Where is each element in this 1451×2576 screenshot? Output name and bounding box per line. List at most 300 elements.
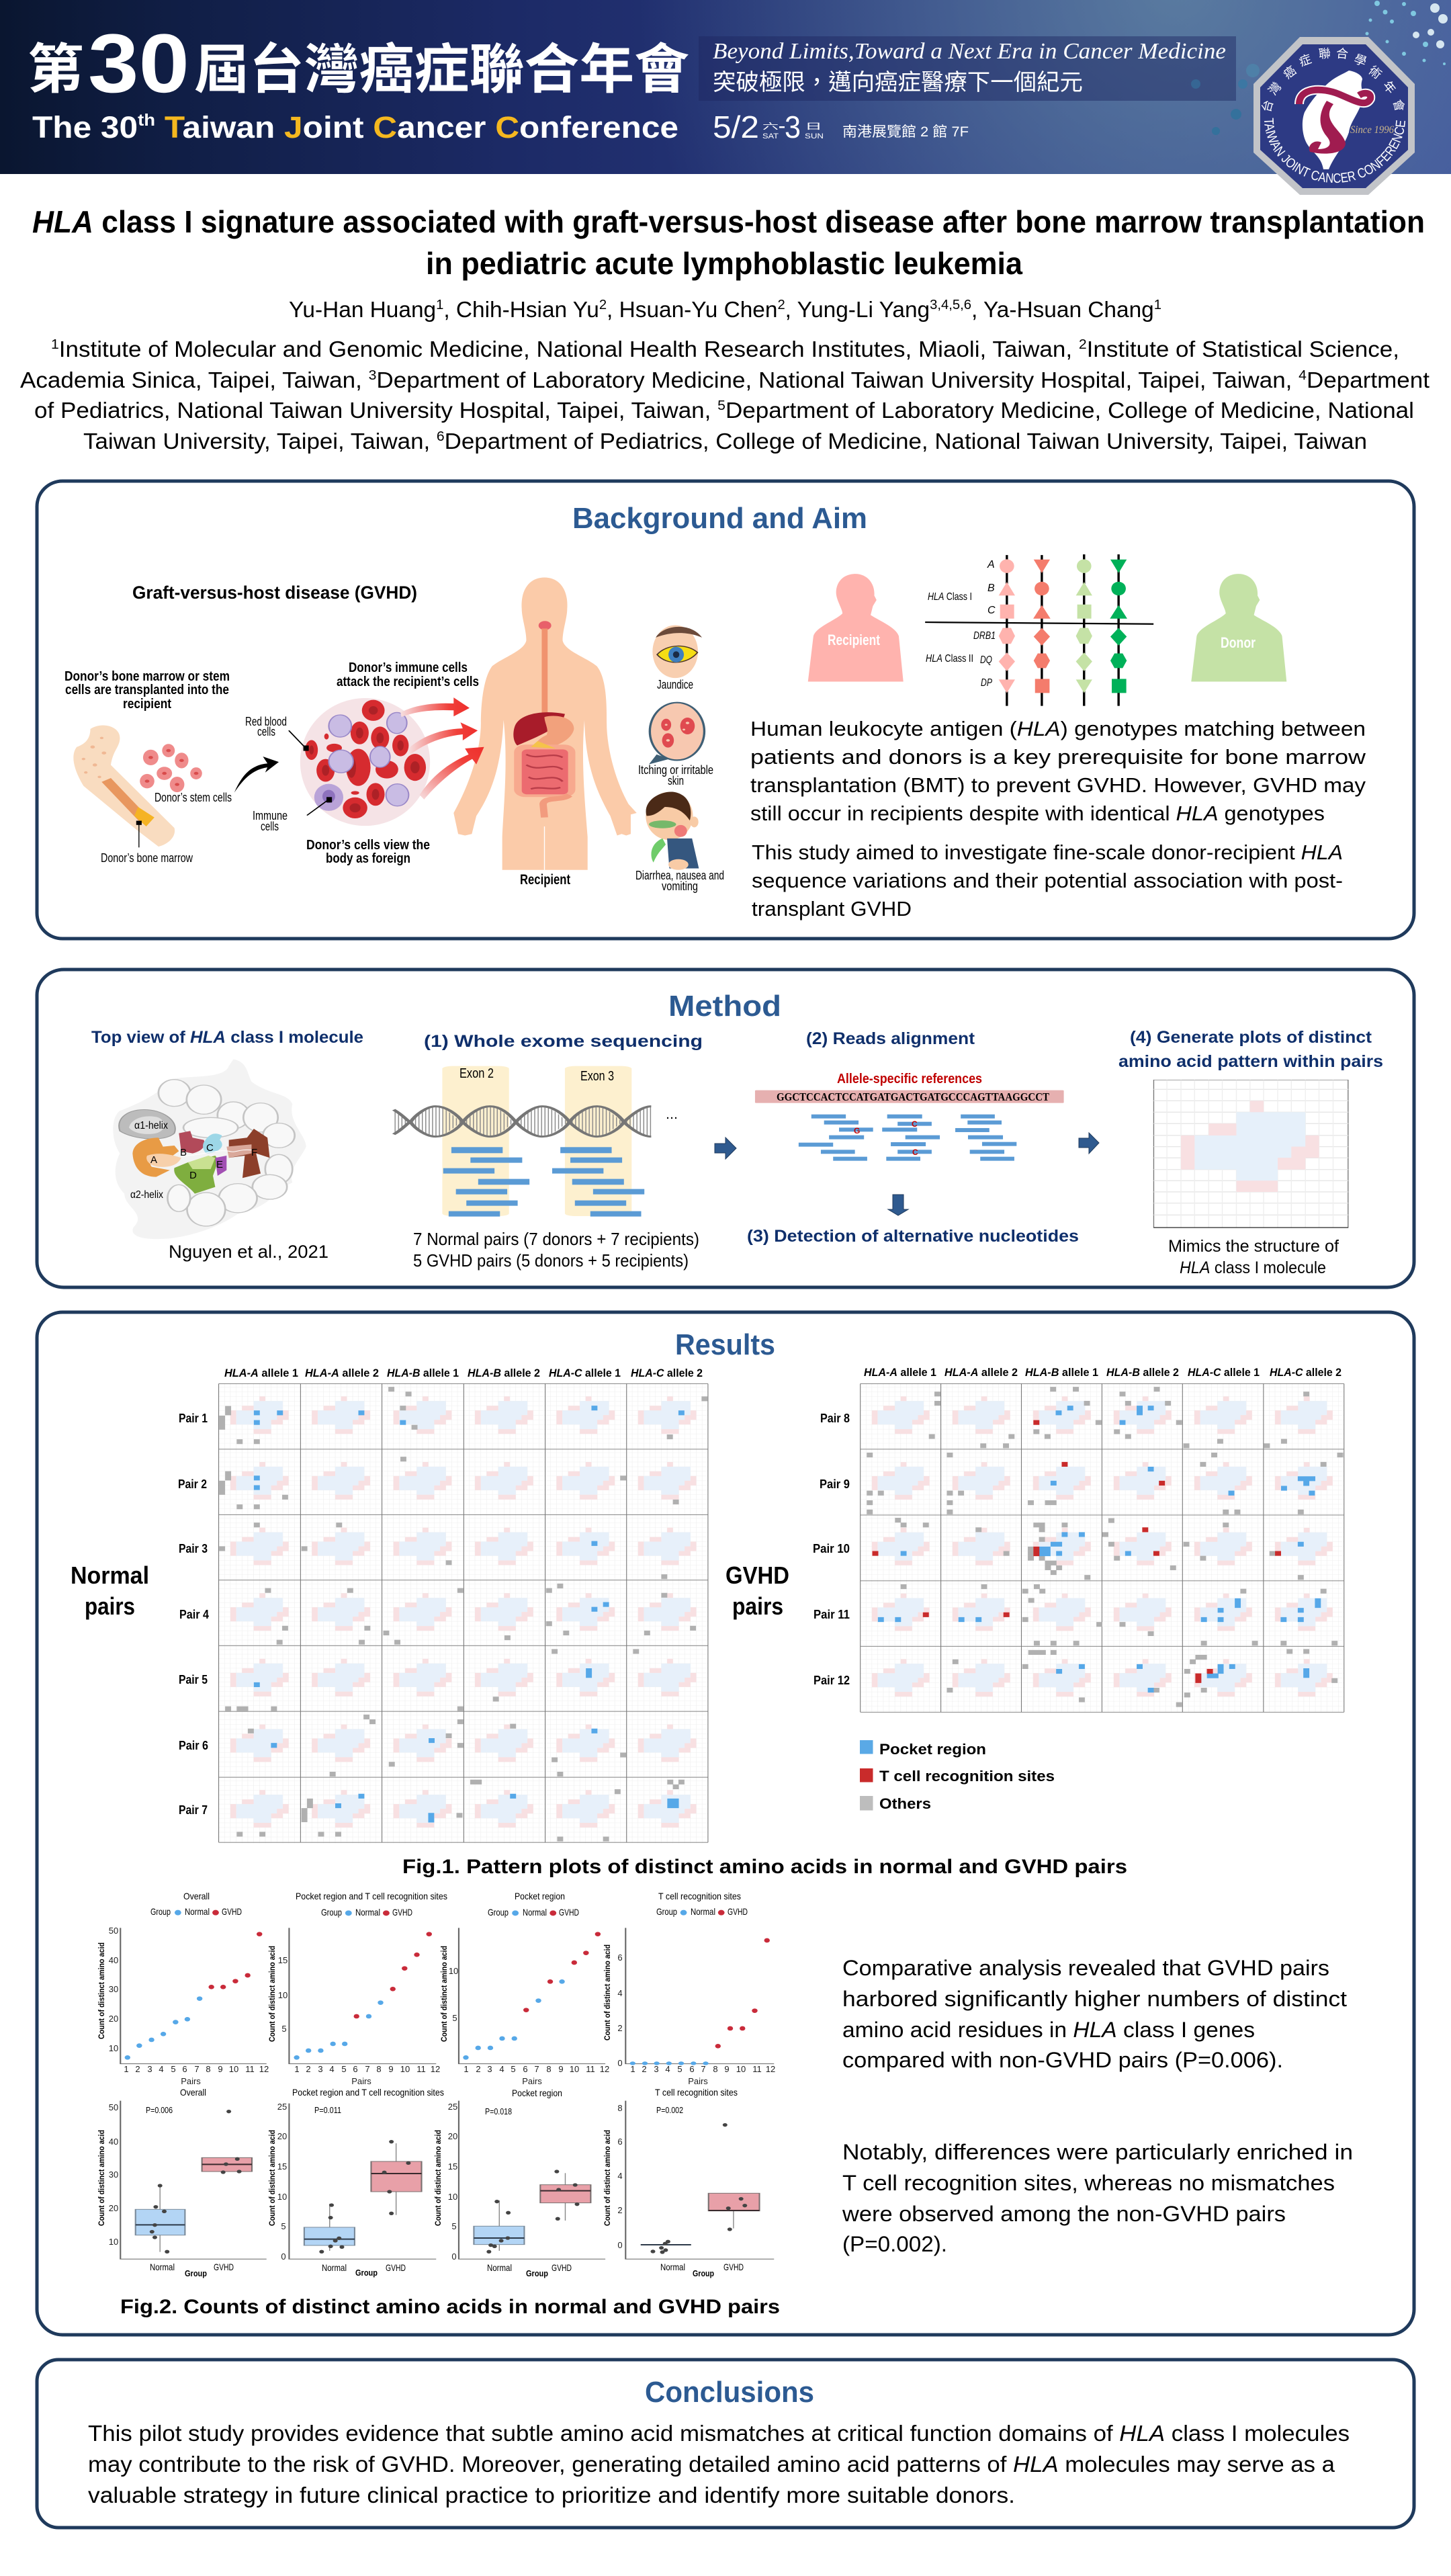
hla matching diagram: HLA Class II — [926, 653, 973, 664]
exome sequencing diagram: Exon 2 — [459, 1066, 494, 1081]
chart: boxplot t cell recognition: 8 — [617, 2103, 623, 2113]
chart: scatter t cell recognition: Normal — [691, 1906, 715, 1917]
chart: scatter pocket and t cell: 3 — [318, 2064, 323, 2074]
chart: scatter t cell recognition: 2 — [617, 2023, 623, 2033]
label: gvhd pairs: GVHD — [726, 1561, 789, 1589]
row labels: gvhd pairs: Pair 9 — [820, 1477, 850, 1491]
chart: scatter overall: 9 — [218, 2064, 223, 2074]
english conference title: th — [138, 111, 155, 130]
hla matching diagram: DQ — [980, 654, 992, 666]
citation: Nguyen et al., 2021 — [169, 1242, 328, 1262]
label: jaundice: Jaundice — [657, 678, 693, 691]
chart: boxplot overall: P=0.006 — [146, 2105, 173, 2115]
chart: scatter pocket region — [439, 1891, 609, 2086]
chart: boxplot pocket region: 20 — [448, 2131, 457, 2141]
text: t cell enrichment — [842, 2140, 1353, 2256]
chart: scatter overall: 10 — [229, 2064, 238, 2074]
chart: scatter t cell recognition — [603, 1891, 775, 2086]
chart: scatter pocket and t cell — [267, 1891, 447, 2086]
text: conclusions: This pilot study provides evidence that subtle amino acid mismatches at critical function domains of HLA class I molecules — [88, 2421, 1350, 2446]
heading: generate plots: amino acid pattern within pairs — [1118, 1052, 1383, 1071]
chart: scatter pocket and t cell: 8 — [376, 2064, 382, 2074]
column headers: normal grid: HLA-C allele 1 — [549, 1367, 621, 1379]
chart: scatter overall: 50 — [109, 1926, 118, 1936]
label: diarrhea: Diarrhea, nausea and — [635, 869, 724, 882]
conference header banner — [0, 0, 1451, 174]
label: immune cells: cells — [261, 820, 279, 833]
chart: boxplot t cell recognition: 6 — [617, 2137, 623, 2147]
column headers: gvhd grid: HLA-B allele 1 — [1025, 1366, 1098, 1379]
legend: pattern plot categories: Others — [879, 1795, 931, 1812]
text: t cell enrichment: Notably, differences were particularly enriched in — [842, 2140, 1353, 2164]
chart: boxplot overall: GVHD — [214, 2262, 234, 2272]
affiliations: 1 — [51, 337, 59, 352]
date and venue: 六 — [762, 122, 779, 131]
chart: boxplot t cell recognition: GVHD — [723, 2262, 744, 2272]
date and venue: SUN — [805, 132, 824, 140]
panel: conclusions — [37, 2360, 1414, 2528]
hla matching diagram: C — [987, 605, 996, 616]
icon: itchy skin bubble — [649, 703, 704, 765]
authors: , Yung-Li Yang — [785, 297, 930, 322]
chart: boxplot pocket and t cell: Normal — [322, 2262, 347, 2273]
authors: 1 — [436, 298, 443, 312]
chart: boxplot pocket and t cell: 20 — [277, 2131, 287, 2141]
label: transplant step: Donor’s bone marrow or stem — [64, 669, 230, 684]
text: background paragraph: transplantation (BMT) to prevent GVHD. However, GVHD may — [750, 773, 1366, 797]
chart: scatter t cell recognition: 6 — [617, 1952, 623, 1963]
hla molecule illustration: C — [206, 1142, 214, 1154]
label: immune cells — [253, 809, 288, 833]
english conference title: The 30 — [32, 110, 128, 144]
conference logo: 台 — [1260, 99, 1276, 114]
date and venue: SAT — [762, 132, 779, 140]
legend: pattern plot categories: Pocket region — [879, 1741, 986, 1758]
affiliations: Department of Pediatrics, College of Medicine, National Taiwan University, Taipei, Taiwan — [445, 429, 1367, 454]
hla matching diagram — [808, 554, 1286, 706]
affiliations: Taiwan University, Taipei, Taiwan, — [83, 429, 411, 454]
column headers: gvhd grid: HLA-B allele 2 — [1106, 1366, 1179, 1379]
chart: scatter t cell recognition: 10 — [736, 2064, 746, 2074]
row labels: gvhd pairs — [813, 1412, 850, 1687]
reads alignment diagram — [755, 1072, 1064, 1161]
chart: boxplot pocket region: 0 — [451, 2251, 457, 2262]
hla matching diagram: Donor — [1221, 634, 1256, 651]
panel: method — [37, 970, 1414, 1287]
chart: scatter pocket region: 5 — [452, 2013, 457, 2023]
date and venue: 3 — [785, 110, 801, 144]
caption: figure 2: Fig.2. Counts of distinct amino acids in normal and GVHD pairs — [120, 2296, 780, 2318]
chart: boxplot pocket region: P=0.018 — [485, 2106, 512, 2116]
conference logo: 會 — [1391, 98, 1407, 113]
conference logo: 灣 — [1266, 80, 1284, 97]
row labels: gvhd pairs: Pair 8 — [820, 1412, 850, 1425]
chart: boxplot pocket and t cell: Group — [355, 2268, 378, 2278]
chart: scatter t cell recognition: 12 — [766, 2064, 775, 2074]
chart: scatter overall: 5 — [171, 2064, 176, 2074]
label: itching — [638, 763, 713, 787]
panel: results — [37, 1312, 1414, 2335]
column headers: normal grid: HLA-A allele 1 — [224, 1367, 298, 1379]
text: t cell enrichment: (P=0.002). — [842, 2232, 947, 2256]
column headers: gvhd grid: HLA-A allele 1 — [864, 1366, 936, 1379]
chart: boxplot pocket region: GVHD — [552, 2262, 572, 2273]
english conference title: Taiwan Joint Cancer Conference — [165, 110, 664, 144]
authors: 1 — [1154, 298, 1161, 312]
chart: boxplot t cell recognition: P=0.002 — [656, 2105, 683, 2115]
heading: detection of alternative nucleotides: (3) Detection of alternative nucleotides — [747, 1227, 1079, 1246]
text: aim paragraph: This study aimed to investigate fine-scale donor-recipient HLA — [752, 841, 1343, 864]
row labels: normal pairs: Pair 3 — [179, 1542, 208, 1555]
label: diarrhea: vomiting — [662, 879, 698, 893]
authors: , Chih-Hsian Yu — [443, 297, 599, 322]
chart: scatter pocket region: 3 — [487, 2064, 492, 2074]
row labels: normal pairs: Pair 1 — [179, 1412, 208, 1425]
label: transplant step — [64, 669, 230, 712]
chart: boxplot pocket and t cell — [267, 2087, 444, 2278]
text: sample counts — [413, 1229, 699, 1271]
chart: boxplot pocket and t cell: 0 — [281, 2251, 286, 2262]
legend: pattern plot categories: T cell recognition sites — [879, 1768, 1055, 1785]
label: transplant step: cells are transplanted into the — [65, 683, 229, 697]
chart: scatter pocket and t cell: 10 — [278, 1990, 288, 2000]
heading: conclusions: Conclusions — [645, 2376, 814, 2409]
chart: scatter t cell recognition: 11 — [752, 2064, 762, 2074]
chart: boxplot pocket region: 25 — [448, 2102, 457, 2112]
chart: scatter overall: 4 — [159, 2064, 164, 2074]
text: comparative analysis — [842, 1956, 1347, 2072]
chart: scatter pocket region: 8 — [546, 2064, 552, 2074]
text: background paragraph: still occur in recipients despite with identical HLA genotypes — [750, 802, 1325, 825]
row labels: normal pairs: Pair 5 — [179, 1673, 208, 1686]
chart: scatter pocket and t cell: 10 — [400, 2064, 410, 2074]
date and venue: 日 — [805, 122, 822, 131]
chart: scatter pocket and t cell: 6 — [353, 2064, 358, 2074]
decoration: DNA helix dots — [1191, 1, 1448, 135]
chart: scatter t cell recognition: 7 — [701, 2064, 706, 2074]
chinese title: 30 — [88, 17, 189, 110]
poster title — [32, 204, 1425, 281]
chart: boxplot pocket and t cell: 25 — [277, 2102, 287, 2112]
chart: scatter t cell recognition: 1 — [630, 2064, 635, 2074]
chart: scatter pocket region: 2 — [476, 2064, 481, 2074]
arrow: to pattern plots — [1079, 1133, 1099, 1154]
date and venue — [713, 110, 969, 144]
chart: scatter pocket and t cell: 15 — [278, 1955, 288, 1965]
arrow: to reads alignment — [715, 1137, 736, 1159]
affiliations: Department of Laboratory Medicine, National Taiwan University Hospital, Taipei, Taiwan, — [376, 368, 1299, 392]
exome sequencing diagram: Exon 3 — [580, 1069, 614, 1084]
chart: scatter pocket and t cell: 4 — [329, 2064, 335, 2074]
label: immune attack: attack the recipient’s cells — [337, 675, 479, 689]
column headers: normal grid — [224, 1367, 703, 1379]
reads alignment diagram: C — [912, 1119, 918, 1129]
row labels: gvhd pairs: Pair 10 — [813, 1542, 850, 1555]
hla molecule illustration: D — [189, 1170, 197, 1181]
chart: boxplot overall: Normal — [150, 2262, 175, 2272]
chart: boxplot pocket region: Pocket region — [512, 2088, 562, 2098]
heading: results: Results — [675, 1328, 775, 1361]
affiliations: Institute of Molecular and Genomic Medicine, National Health Research Institutes, Miaoli, Taiwan, — [59, 337, 1079, 361]
chart: scatter t cell recognition: 4 — [617, 1988, 623, 1998]
row labels: gvhd pairs: Pair 12 — [814, 1674, 850, 1687]
affiliations: Department of Laboratory Medicine, College of Medicine, National — [726, 398, 1414, 423]
chart: scatter pocket and t cell: Normal — [355, 1907, 380, 1918]
hla matching diagram: HLA Class I — [928, 591, 972, 603]
text: background paragraph: Human leukocyte antigen ( HLA) genotypes matching between — [750, 717, 1366, 740]
chart: scatter pocket and t cell: 1 — [294, 2064, 300, 2074]
hla molecule illustration: B — [180, 1147, 187, 1158]
hla molecule illustration: A — [150, 1154, 157, 1166]
chart: scatter overall: Count of distinct amino acid — [97, 1942, 106, 2039]
text: comparative analysis: amino acid residues in HLA class I genes — [842, 2018, 1255, 2042]
chart: scatter t cell recognition: 6 — [689, 2064, 695, 2074]
chart: scatter t cell recognition: 5 — [677, 2064, 683, 2074]
conference logo: Since 1996 — [1350, 124, 1394, 136]
stem cells — [140, 744, 202, 792]
hla matching diagram: A — [987, 559, 995, 570]
heading: reads alignment: (2) Reads alignment — [806, 1029, 975, 1048]
chart: scatter overall: 12 — [259, 2064, 269, 2074]
chart: boxplot t cell recognition: Normal — [660, 2262, 685, 2272]
chart: scatter t cell recognition: 9 — [724, 2064, 730, 2074]
chart: scatter pocket and t cell: 2 — [306, 2064, 311, 2074]
recipient body — [453, 578, 637, 870]
reads alignment diagram: G — [854, 1126, 860, 1135]
label: diarrhea — [635, 869, 724, 893]
chart: boxplot pocket region: 5 — [451, 2221, 457, 2231]
chart: scatter overall: Normal — [185, 1906, 210, 1917]
poster title: in pediatric acute lymphoblastic leukemia — [426, 246, 1022, 281]
organs — [513, 621, 575, 818]
chart: boxplot overall: 20 — [109, 2203, 118, 2213]
heading: method: Method — [668, 990, 781, 1023]
row labels: normal pairs: Pair 7 — [179, 1803, 208, 1817]
chart: scatter pocket and t cell: 5 — [281, 2024, 287, 2034]
chart: boxplot overall: 50 — [109, 2102, 118, 2112]
label: itching: Itching or irritable — [638, 763, 713, 777]
chart: scatter overall: GVHD — [222, 1906, 242, 1917]
text: aim paragraph — [752, 841, 1343, 920]
chart: scatter t cell recognition: Count of distinct amino acid — [603, 1944, 612, 2041]
pattern grid: gvhd pairs — [861, 1383, 1344, 1712]
slogan chinese: 突破極限，邁向癌症醫療下一個紀元 — [713, 70, 1083, 95]
conference logo: 症 — [1297, 52, 1313, 69]
chart: boxplot pocket and t cell: GVHD — [386, 2262, 406, 2273]
exome shapes — [394, 1066, 651, 1217]
chart: scatter pocket region: Normal — [523, 1907, 547, 1918]
heading: whole exome sequencing: (1) Whole exome sequencing — [424, 1032, 703, 1051]
conference logo — [1254, 37, 1415, 195]
label: red blood cells — [245, 715, 287, 738]
arrow: to detection — [888, 1195, 908, 1215]
exome sequencing diagram — [394, 1066, 678, 1217]
affiliations: Institute of Statistical Science, — [1087, 337, 1399, 361]
chart: scatter pocket and t cell: Group — [321, 1907, 342, 1918]
chart: boxplot pocket and t cell: 10 — [277, 2192, 287, 2202]
row labels: normal pairs: Pair 6 — [179, 1739, 208, 1752]
label: normal pairs — [71, 1561, 149, 1620]
chart: boxplot t cell recognition: 2 — [617, 2205, 623, 2215]
text: comparative analysis: Comparative analysis revealed that GVHD pairs — [842, 1956, 1329, 1980]
chart: scatter t cell recognition: 8 — [713, 2064, 718, 2074]
poster title: HLA class I signature associated with graft-versus-host disease after bone marrow transplantation — [32, 204, 1425, 239]
chart: scatter pocket region: 12 — [600, 2064, 609, 2074]
label: recipient: Recipient — [520, 872, 570, 888]
chart: scatter overall: 7 — [194, 2064, 200, 2074]
row labels: normal pairs: Pair 4 — [179, 1608, 209, 1621]
heading: generate plots: (4) Generate plots of distinct — [1130, 1028, 1372, 1047]
affiliations: 6 — [437, 429, 445, 444]
chart: scatter t cell recognition: 2 — [642, 2064, 647, 2074]
chart: boxplot t cell recognition: 4 — [617, 2171, 623, 2181]
chart: boxplot overall: 30 — [109, 2170, 118, 2180]
chart: scatter overall: 2 — [135, 2064, 140, 2074]
reads alignment diagram: GGCTCCACTCCATGATGACTGATGCCCAGTTAAGGCCT — [777, 1090, 1050, 1103]
heading: top view: Top view of HLA class I molecule — [91, 1028, 363, 1047]
chart: scatter overall: 20 — [109, 2014, 118, 2024]
chart: scatter overall: 8 — [206, 2064, 211, 2074]
chart: scatter overall: 6 — [182, 2064, 187, 2074]
gvhd drawing shapes — [73, 578, 704, 870]
chart: boxplot overall: 40 — [109, 2137, 118, 2147]
text: t cell enrichment: T cell recognition sites, whereas no mismatches — [842, 2171, 1335, 2195]
chart: boxplot pocket and t cell: Pocket region and T cell recognition sites — [292, 2087, 444, 2098]
authors: Yu-Han Huang — [289, 297, 434, 322]
conference logo: 聯 — [1318, 46, 1331, 61]
chart: scatter pocket and t cell: Count of distinct amino acid — [267, 1946, 277, 2042]
chart: boxplot pocket region: Group — [526, 2268, 548, 2278]
pattern plot template — [1153, 1080, 1348, 1228]
chart: boxplot t cell recognition: Count of distinct amino acid — [603, 2130, 612, 2226]
chart: scatter overall: 10 — [109, 2043, 118, 2053]
chart: boxplot t cell recognition: Group — [693, 2268, 714, 2278]
authors: , Ya-Hsuan Chang — [971, 297, 1154, 322]
chart: boxplot overall: Group — [185, 2268, 207, 2278]
chart: scatter overall: Group — [150, 1906, 171, 1917]
text: aim paragraph: sequence variations and their potential association with post- — [752, 869, 1343, 892]
bone — [73, 726, 175, 847]
affiliations — [20, 337, 1430, 454]
label: itching: skin — [668, 774, 684, 787]
chart: scatter overall: Overall — [183, 1891, 210, 1901]
affiliations: of Pediatrics, National Taiwan University Hospital, Taipei, Taiwan, — [34, 398, 671, 423]
slogan english: Beyond Limits,Toward a Next Era in Cancer Medicine — [713, 39, 1226, 64]
panel: background and aim — [37, 481, 1414, 939]
chart: boxplot pocket and t cell: 5 — [281, 2221, 286, 2231]
exome sequencing diagram: ... — [666, 1107, 678, 1122]
chart: scatter overall: 30 — [109, 1984, 118, 1994]
chart: scatter overall — [97, 1891, 269, 2086]
column headers: normal grid: HLA-B allele 1 — [387, 1367, 459, 1379]
label: gvhd pairs: pairs — [732, 1592, 783, 1620]
icon: vomiting child — [646, 792, 699, 870]
text: sample counts: 5 GVHD pairs (5 donors + 5 recipients) — [413, 1250, 689, 1271]
text: conclusions — [88, 2421, 1350, 2507]
hla molecule illustration: F — [251, 1147, 257, 1158]
chart: scatter overall: 3 — [147, 2064, 152, 2074]
chart: boxplot pocket region: 10 — [448, 2192, 457, 2202]
affiliations: 2 — [1079, 337, 1087, 352]
label: gvhd pairs — [726, 1561, 789, 1620]
chart: scatter t cell recognition: 4 — [665, 2064, 670, 2074]
caption: figure 1: Fig.1. Pattern plots of distinct amino acids in normal and GVHD pairs — [402, 1856, 1127, 1878]
hla molecule illustration: α1-helix — [134, 1120, 168, 1131]
arrows: immune attack — [400, 697, 484, 800]
text: comparative analysis: compared with non-GVHD pairs (P=0.006). — [842, 2048, 1283, 2072]
text: conclusions: valuable strategy in future clinical practice to prioritize and identify more suitable donors. — [88, 2483, 1015, 2507]
chart: scatter pocket and t cell: 7 — [365, 2064, 370, 2074]
chart: scatter pocket region: 1 — [464, 2064, 469, 2074]
label: graft-versus-host: Graft-versus-host disease (GVHD) — [132, 583, 417, 603]
chart: boxplot t cell recognition: 0 — [617, 2240, 623, 2250]
chinese title: 屆台灣癌症聯合年會 — [194, 40, 689, 99]
authors: , Hsuan-Yu Chen — [607, 297, 777, 322]
hla matching diagram: B — [987, 583, 995, 594]
label: view as foreign — [306, 838, 430, 866]
heading: generate plots — [1118, 1028, 1383, 1071]
chart: boxplot overall: 10 — [109, 2237, 118, 2247]
chart: scatter overall: 11 — [245, 2064, 255, 2074]
chart: scatter overall: Pairs — [181, 2076, 201, 2086]
blood cells — [289, 698, 430, 826]
molecule surface shapes — [113, 1060, 306, 1239]
column headers: normal grid: HLA-B allele 2 — [468, 1367, 540, 1379]
text: sample counts: 7 Normal pairs (7 donors + 7 recipients) — [413, 1229, 699, 1249]
chinese title: 第 — [28, 40, 84, 99]
column headers: normal grid: HLA-A allele 2 — [305, 1367, 379, 1379]
hla molecule illustration: α2-helix — [130, 1189, 163, 1201]
hla molecule illustration: E — [216, 1159, 223, 1170]
chart: scatter pocket region: 11 — [586, 2064, 595, 2074]
chart: scatter pocket region: GVHD — [559, 1907, 579, 1918]
affiliations: 5 — [717, 398, 726, 413]
column headers: gvhd grid: HLA-A allele 2 — [944, 1366, 1018, 1379]
label: view as foreign: body as foreign — [326, 851, 410, 866]
label: immune cells: Immune — [253, 809, 288, 822]
authors: 2 — [599, 298, 607, 312]
chinese title — [28, 17, 689, 110]
conference logo: TAIWAN JOINT CANCER CONFERENCE — [1264, 118, 1405, 183]
chart: scatter pocket region: 10 — [570, 2064, 579, 2074]
label: stem cells: Donor’s stem cells — [155, 791, 232, 804]
chart: boxplot overall: Overall — [180, 2087, 206, 2098]
text: aim paragraph: transplant GVHD — [752, 897, 912, 920]
chart: boxplot pocket region: 15 — [448, 2161, 457, 2172]
chart: boxplot pocket and t cell: P=0.011 — [314, 2105, 341, 2115]
affiliations: 4 — [1299, 368, 1307, 383]
column headers: gvhd grid: HLA-C allele 1 — [1188, 1366, 1260, 1379]
gvhd illustration — [64, 578, 724, 893]
chart: scatter t cell recognition: Group — [656, 1906, 677, 1917]
authors: 3,4,5,6 — [930, 298, 971, 312]
conference logo: 年 — [1380, 79, 1398, 96]
label: view as foreign: Donor’s cells view the — [306, 838, 430, 853]
hla matching diagram: DP — [981, 677, 992, 689]
chart: scatter pocket and t cell: Pairs — [351, 2076, 371, 2086]
pattern grid: normal pairs — [219, 1383, 708, 1843]
row labels: normal pairs: Pair 2 — [178, 1477, 207, 1491]
chart: scatter pocket region: Group — [488, 1907, 509, 1918]
chart: scatter overall: 40 — [109, 1955, 118, 1965]
chart: boxplot overall — [97, 2087, 267, 2278]
chart: scatter pocket and t cell: 5 — [341, 2064, 347, 2074]
conference logo: 學 — [1352, 52, 1368, 69]
chart: boxplot t cell recognition — [603, 2087, 774, 2278]
conference logo: 合 — [1335, 46, 1349, 61]
chart: boxplot pocket region: Count of distinct amino acid — [433, 2130, 443, 2226]
chart: scatter t cell recognition: GVHD — [728, 1906, 748, 1917]
